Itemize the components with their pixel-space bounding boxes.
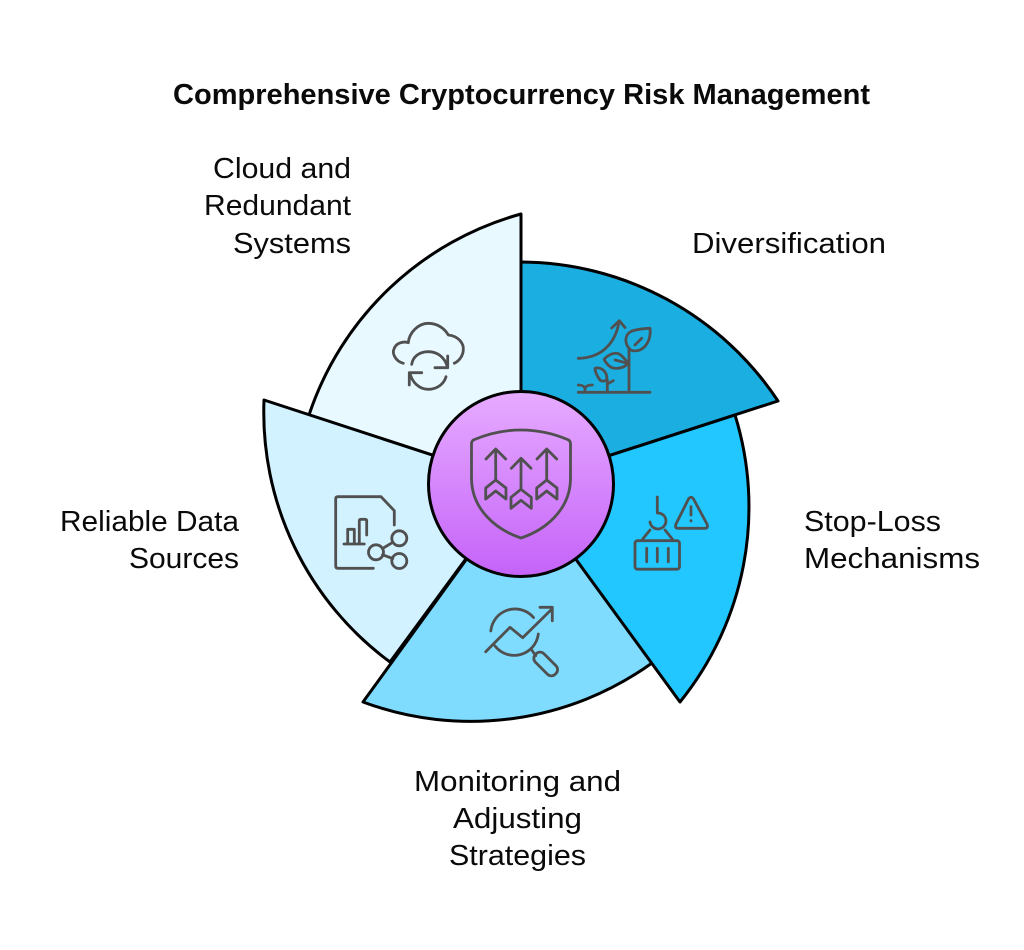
icon: magnifier with rising chart — [486, 607, 560, 678]
label: stop-loss mechanisms: Stop-Loss — [804, 506, 941, 538]
label: monitoring and adjusting strategies: Monitoring and — [414, 766, 621, 798]
icon: plant growth — [578, 321, 650, 392]
label: cloud and redundant systems: Redundant — [204, 190, 351, 222]
label: reliable data sources: Sources — [129, 543, 239, 575]
label: stop-loss mechanisms — [804, 506, 980, 575]
label: cloud and redundant systems — [204, 153, 351, 260]
panel: diversification sector — [521, 262, 778, 484]
label: cloud and redundant systems: Cloud and — [213, 153, 351, 185]
label: diversification: Diversification — [692, 228, 886, 260]
title: Comprehensive Cryptocurrency Risk Management — [173, 79, 870, 111]
panel: reliable data sources sector — [264, 400, 521, 662]
label: monitoring and adjusting strategies — [414, 766, 621, 872]
icon: shield with arrows — [472, 430, 570, 538]
icon: hook container and warning — [635, 497, 707, 569]
label: cloud and redundant systems: Systems — [233, 228, 351, 260]
panel: monitoring and adjusting strategies sector — [363, 484, 652, 721]
label: stop-loss mechanisms: Mechanisms — [804, 543, 980, 575]
icon: cloud with sync arrows — [393, 323, 463, 389]
label: monitoring and adjusting strategies: Strategies — [449, 840, 586, 872]
center circle — [428, 392, 614, 576]
label: reliable data sources: Reliable Data — [60, 506, 239, 538]
panel: stop-loss mechanisms sector — [521, 415, 749, 702]
icon: document with chart and share nodes — [336, 497, 407, 568]
label: reliable data sources — [60, 506, 239, 575]
label: monitoring and adjusting strategies: Adjusting — [453, 803, 582, 835]
panel: cloud and redundant systems sector — [309, 214, 521, 484]
